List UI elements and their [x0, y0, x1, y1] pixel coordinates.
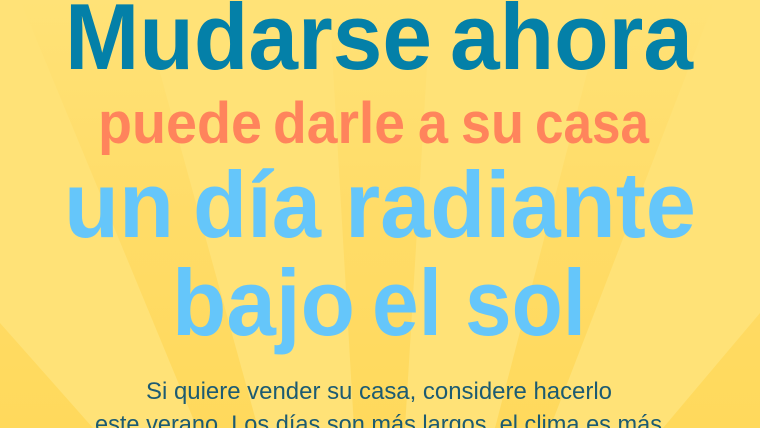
headline: un día radiante	[64, 152, 696, 257]
headline: bajo el sol: el	[372, 250, 442, 355]
body text	[95, 378, 662, 428]
headline: bajo el sol: sol	[465, 250, 586, 355]
subtitle: puede darle a su casa: a	[418, 91, 449, 156]
body text: Si quiere vender su casa, considere hacerlo	[146, 378, 612, 405]
subtitle: puede darle a su casa: darle	[273, 91, 405, 156]
headline: un día radiante: radiante	[345, 152, 696, 257]
subtitle: puede darle a su casa	[98, 91, 650, 156]
headline: bajo el sol: bajo	[172, 250, 355, 355]
title: Mudarse ahora	[65, 0, 694, 89]
headline: un día radiante: día	[193, 152, 322, 257]
headline: bajo el sol	[172, 250, 586, 355]
headline: un día radiante: un	[64, 152, 174, 257]
subtitle: puede darle a su casa: su	[461, 91, 524, 156]
subtitle: puede darle a su casa: puede	[98, 91, 262, 156]
subtitle: puede darle a su casa: casa	[535, 91, 650, 156]
